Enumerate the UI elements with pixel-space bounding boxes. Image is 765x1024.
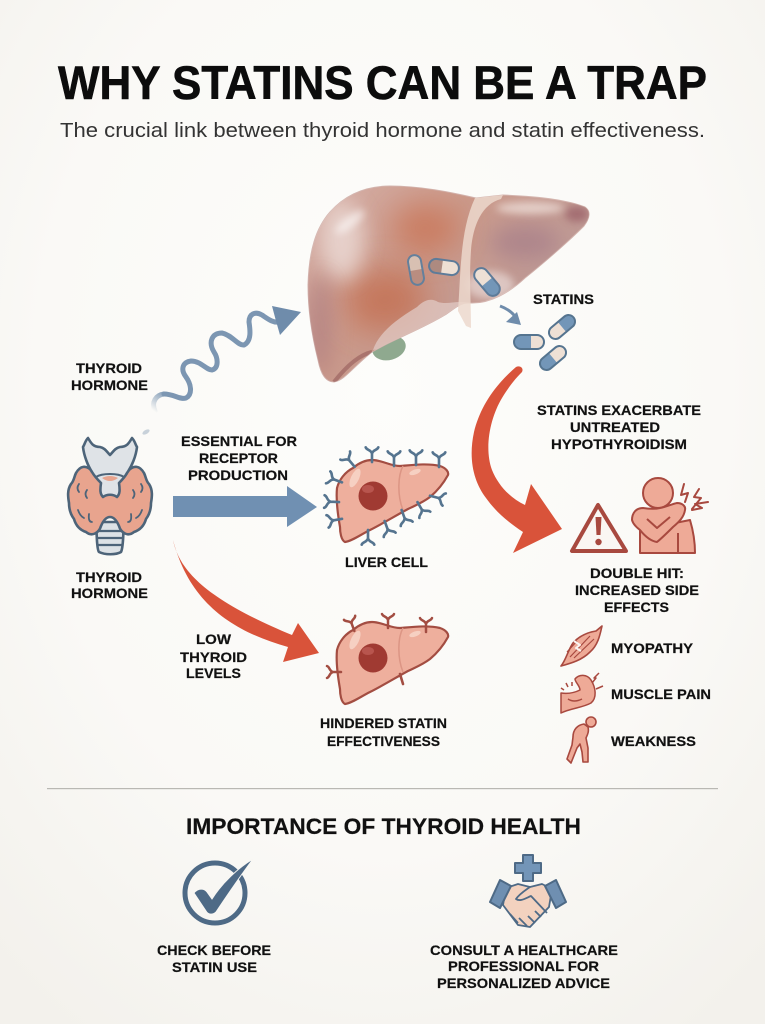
icon: handshake with medical cross — [490, 855, 566, 927]
label: statins exacerbate untreated hypothyroidism — [537, 402, 701, 452]
receptors — [324, 447, 446, 545]
label: statins exacerbate untreated hypothyroidism: UNTREATED — [570, 419, 660, 435]
label: check before statin use: CHECK BEFORE — [157, 942, 271, 958]
label: low thyroid levels: THYROID — [180, 649, 247, 665]
ligament — [458, 195, 503, 328]
subtitle: The crucial link between thyroid hormone and statin effectiveness. — [60, 119, 705, 142]
label: thyroid hormone lower: THYROID — [76, 569, 142, 585]
icon: person with shoulder pain — [632, 478, 708, 553]
title: WHY STATINS CAN BE A TRAP — [58, 56, 707, 109]
label: hindered statin effectiveness: HINDERED STATIN — [320, 715, 447, 731]
icon: weakness — [567, 717, 596, 763]
icon: warning triangle — [572, 505, 626, 551]
arrow: small blue to statins — [500, 306, 521, 325]
icon: liver cell with many receptors — [324, 447, 448, 545]
label: essential for receptor production — [181, 433, 297, 483]
label: low thyroid levels: LEVELS — [186, 665, 241, 681]
label: check before statin use — [157, 942, 271, 975]
label: myopathy: MYOPATHY — [611, 640, 694, 656]
icon: liver cell with few receptors — [327, 614, 448, 704]
label: double hit: EFFECTS — [604, 599, 669, 615]
label: consult a healthcare professional: CONSULT A HEALTHCARE — [430, 942, 618, 958]
label: consult a healthcare professional: PERSONALIZED ADVICE — [437, 975, 610, 991]
label: consult a healthcare professional: PROFESSIONAL FOR — [448, 958, 599, 974]
icon: statin pills — [514, 312, 578, 373]
label: statins exacerbate untreated hypothyroidism: HYPOTHYROIDISM — [551, 436, 687, 452]
label: double hit: DOUBLE HIT: — [590, 565, 684, 581]
label: low thyroid levels — [180, 631, 247, 681]
label: check before statin use: STATIN USE — [172, 959, 257, 975]
icon: myopathy — [561, 626, 602, 666]
pill in liver 3 — [471, 265, 503, 299]
label: thyroid hormone upper: THYROID — [76, 360, 142, 376]
pill in liver 1 — [407, 254, 425, 286]
arrow: large red curve — [472, 366, 562, 553]
label: hindered statin effectiveness — [320, 715, 447, 749]
label: thyroid hormone lower — [71, 569, 148, 601]
label: thyroid hormone lower: HORMONE — [71, 585, 148, 601]
label: hindered statin effectiveness: EFFECTIVENESS — [327, 733, 440, 749]
divider line — [47, 788, 718, 789]
illustration: liver with pills — [308, 186, 589, 382]
label: essential for receptor production: RECEPTOR — [199, 450, 278, 466]
gallbladder — [369, 332, 409, 364]
icon: muscle pain — [561, 673, 603, 713]
label: thyroid hormone upper: HORMONE — [71, 377, 148, 393]
label: thyroid hormone upper — [71, 360, 148, 393]
arrow: blue to liver cell — [173, 486, 317, 527]
label: liver cell: LIVER CELL — [345, 554, 428, 570]
arrow: wavy thyroid hormone signal — [142, 306, 301, 436]
icon: checkmark in circle — [185, 859, 253, 923]
label: essential for receptor production: PRODUCTION — [188, 467, 288, 483]
icon: thyroid gland — [68, 438, 152, 554]
label: statins: STATINS — [533, 291, 594, 307]
label: low thyroid levels: LOW — [196, 631, 232, 647]
pill in liver 2 — [428, 258, 460, 276]
label: consult a healthcare professional — [430, 942, 618, 991]
label: double hit: INCREASED SIDE — [575, 582, 699, 598]
label: statins exacerbate untreated hypothyroidism: STATINS EXACERBATE — [537, 402, 701, 418]
label: muscle pain: MUSCLE PAIN — [611, 686, 711, 702]
label: double hit — [575, 565, 699, 615]
arrow: red down to hindered cell — [173, 540, 319, 662]
heading: importance of thyroid health: IMPORTANCE OF THYROID HEALTH — [186, 814, 581, 839]
label: weakness: WEAKNESS — [611, 733, 696, 749]
label: essential for receptor production: ESSENTIAL FOR — [181, 433, 297, 449]
damaged receptors — [327, 614, 432, 684]
